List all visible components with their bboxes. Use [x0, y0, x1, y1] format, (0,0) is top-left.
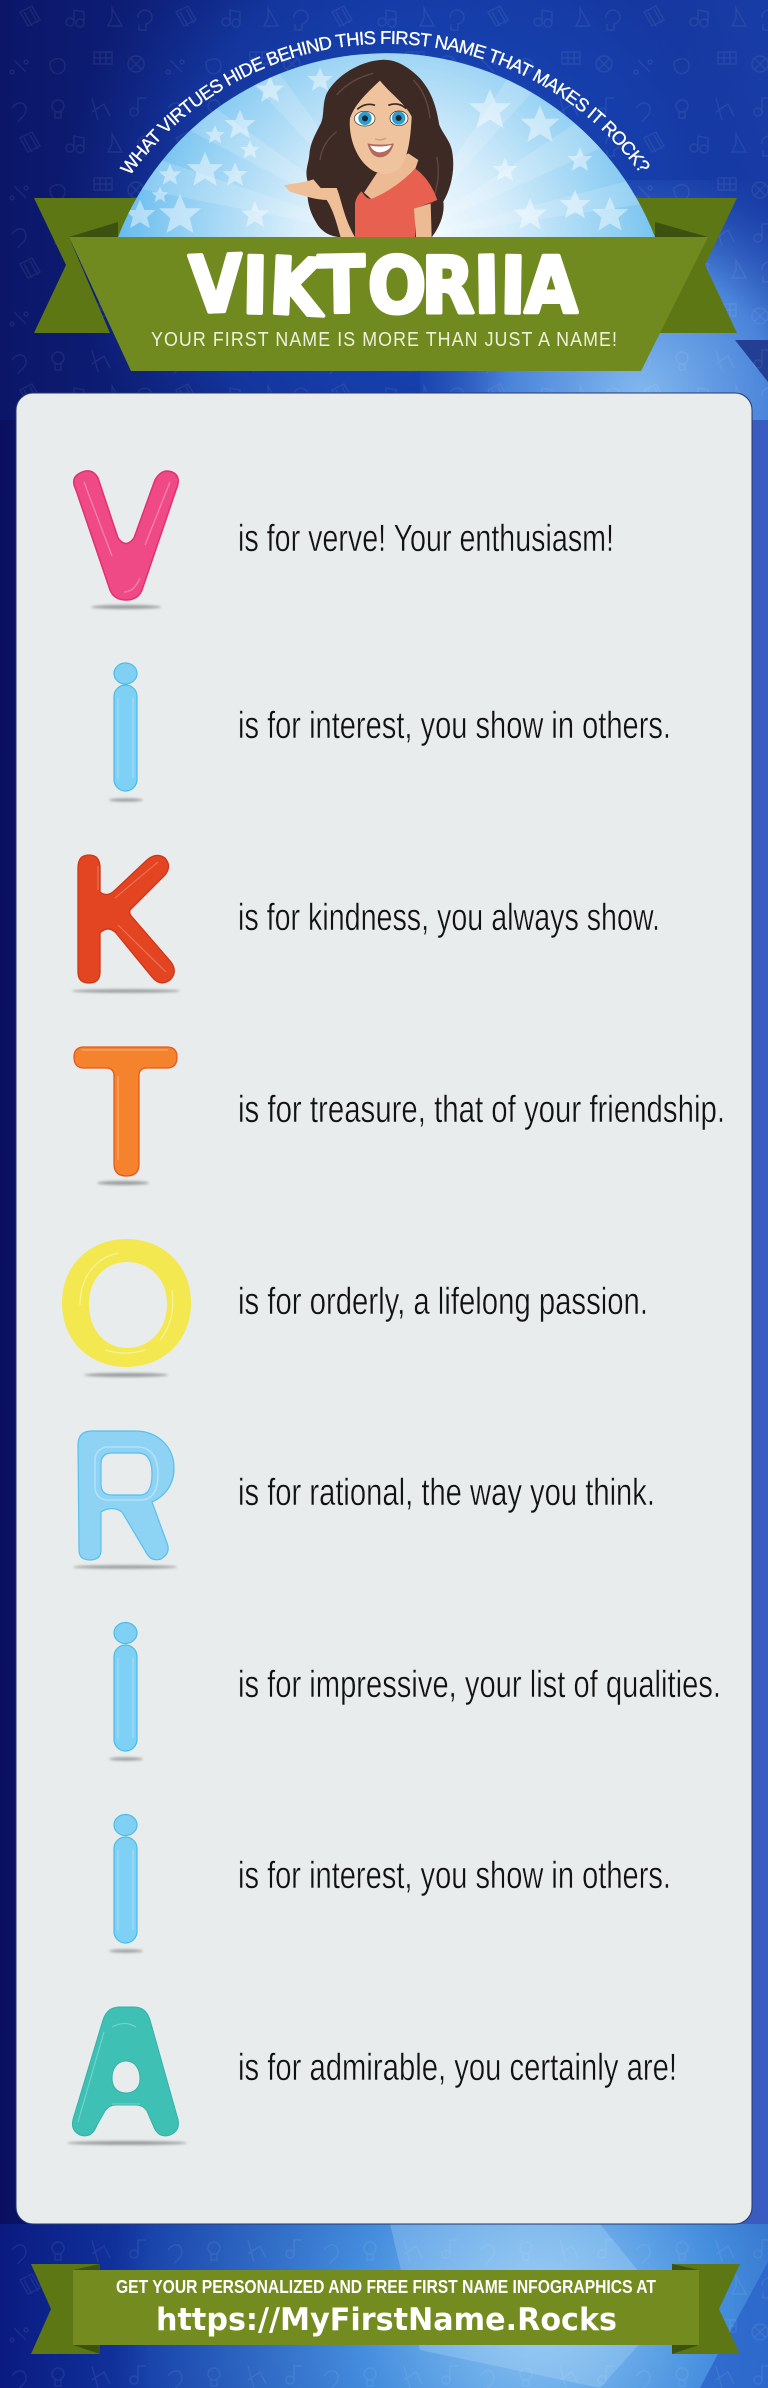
footer text line: GET YOUR PERSONALIZED AND FREE FIRST NAME INFOGRAPHICS AT — [116, 2277, 656, 2297]
footer ribbon — [31, 2264, 740, 2354]
panel: letters — [16, 393, 752, 2224]
row O: is for orderly, a lifelong passion. — [238, 1281, 648, 1323]
title: name: VIKTORIIA — [188, 239, 578, 335]
hair — [306, 60, 453, 237]
row A — [67, 2007, 677, 2145]
back ribbon tails — [34, 198, 737, 333]
row K — [72, 855, 660, 993]
face — [350, 81, 412, 174]
main ribbon — [69, 222, 708, 371]
hair highlights — [320, 73, 438, 203]
row V: is for verve! Your enthusiasm! — [238, 518, 614, 560]
row I — [109, 663, 671, 802]
eyes — [354, 111, 408, 126]
row I — [109, 1814, 671, 1953]
arm and hand — [284, 179, 355, 237]
character: woman with long brown hair presenting — [284, 60, 453, 237]
arched headline: WHAT VIRTUES HIDE BEHIND THIS FIRST NAME THAT MAKES IT ROCK? — [119, 31, 650, 174]
row V — [74, 471, 614, 609]
brows — [357, 104, 406, 109]
row R: is for rational, the way you think. — [238, 1472, 655, 1514]
row T — [74, 1047, 725, 1185]
row O — [62, 1239, 648, 1377]
neck and chest — [364, 153, 418, 199]
subtitle: YOUR FIRST NAME IS MORE THAN JUST A NAME! — [151, 329, 618, 351]
dome with starburst — [100, 50, 670, 240]
shirt — [355, 168, 437, 237]
right arm — [414, 203, 432, 237]
row I — [109, 1622, 721, 1761]
footer url: https://MyFirstName.Rocks — [156, 2302, 617, 2338]
nose — [375, 138, 386, 140]
row R — [73, 1431, 655, 1569]
mouth — [367, 143, 394, 157]
